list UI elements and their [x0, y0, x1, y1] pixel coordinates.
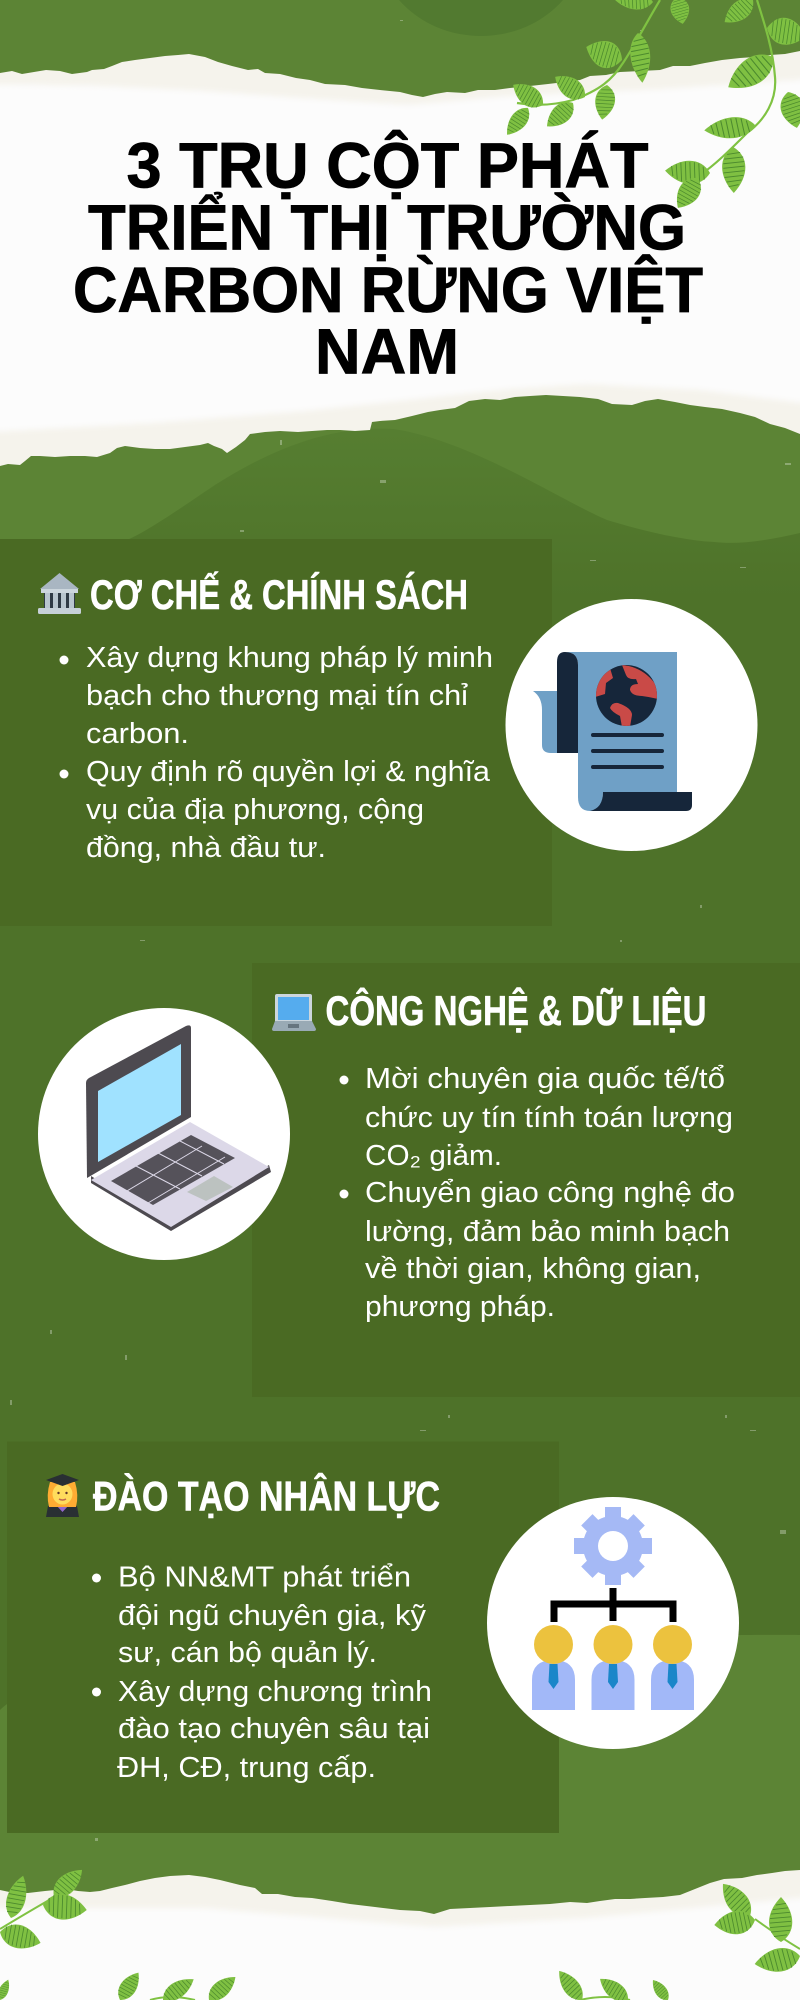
heading: đào tạo nhân lực: ĐÀO TẠO NHÂN LỰC — [93, 1472, 440, 1520]
background: lower light green hill — [0, 1635, 800, 1950]
heading: cơ chế & chính sách: CƠ CHẾ & CHÍNH SÁCH — [90, 571, 468, 618]
background: upper light green with hill — [0, 0, 800, 543]
vine: bottom right leaves — [713, 1877, 800, 1976]
bullet list: công nghệ: chức uy tín tính toán lượng — [365, 1102, 733, 1134]
bullet list: đào tạo: sư, cán bộ quản lý. — [118, 1637, 377, 1669]
background: dark hump at top — [376, 0, 586, 36]
vine: bottom left leaves — [0, 1863, 88, 1954]
title: 3 TRỤ CỘT PHÁT — [126, 128, 648, 202]
bullet list: cơ chế: Quy định rõ quyền lợi & nghĩa — [86, 756, 491, 788]
icon: laptop illustration — [38, 1008, 290, 1260]
bullet list: đào tạo: đội ngũ chuyên gia, kỹ — [118, 1600, 427, 1632]
panel: đào tạo nhân lực — [7, 1442, 559, 1833]
bullet list: đào tạo: Xây dựng chương trình — [118, 1676, 432, 1708]
bullet list: công nghệ — [340, 1063, 735, 1323]
vine: bottom centre right leaves — [553, 1966, 672, 2000]
bullet list: đào tạo — [92, 1562, 432, 1784]
icon: laptop emoji — [272, 994, 316, 1031]
bullet list: cơ chế: bạch cho thương mại tín chỉ — [86, 680, 469, 712]
bullet list: cơ chế: vụ của địa phương, cộng — [86, 794, 424, 826]
bullet list: cơ chế: Xây dựng khung pháp lý minh — [86, 642, 493, 674]
panel: công nghệ & dữ liệu — [252, 963, 800, 1397]
heading: công nghệ & dữ liệu: CÔNG NGHỆ & DỮ LIỆU — [326, 986, 706, 1034]
panel: cơ chế & chính sách — [0, 539, 552, 926]
bullet list: cơ chế: đồng, nhà đầu tư. — [86, 832, 326, 864]
torn paper: top title sheet — [0, 51, 800, 466]
icon: classical building — [38, 573, 81, 614]
bullet list: cơ chế: carbon. — [86, 718, 189, 750]
icon: student emoji — [46, 1474, 79, 1517]
vine: top right leaves — [501, 0, 800, 214]
bullet list: công nghệ: phương pháp. — [365, 1291, 555, 1323]
icon: document scroll with globe — [506, 599, 758, 851]
bullet list: công nghệ: Chuyển giao công nghệ đo — [365, 1177, 735, 1209]
bullet list: cơ chế — [60, 642, 493, 864]
bullet list: công nghệ: lường, đảm bảo minh bạch — [365, 1216, 730, 1248]
icon: organisation chart with gear — [487, 1497, 739, 1749]
bullet list: công nghệ: về thời gian, không gian, — [365, 1253, 701, 1285]
torn paper: bottom sheet — [0, 1870, 800, 2000]
bullet list: công nghệ: Mời chuyên gia quốc tế/tổ — [365, 1063, 725, 1095]
title: CARBON RỪNG VIỆT — [73, 253, 703, 326]
vine: bottom centre left leaves — [0, 1968, 241, 2000]
title: TRIỂN THỊ TRƯỜNG — [88, 190, 686, 264]
bullet list: đào tạo: đào tạo chuyên sâu tại — [118, 1713, 430, 1745]
title — [73, 128, 703, 388]
title: NAM — [315, 316, 459, 388]
bullet list: đào tạo: ĐH, CĐ, trung cấp. — [117, 1752, 376, 1784]
bullet list: đào tạo: Bộ NN&MT phát triển — [118, 1562, 411, 1594]
bullet list: công nghệ: CO₂ giảm. — [365, 1140, 502, 1172]
